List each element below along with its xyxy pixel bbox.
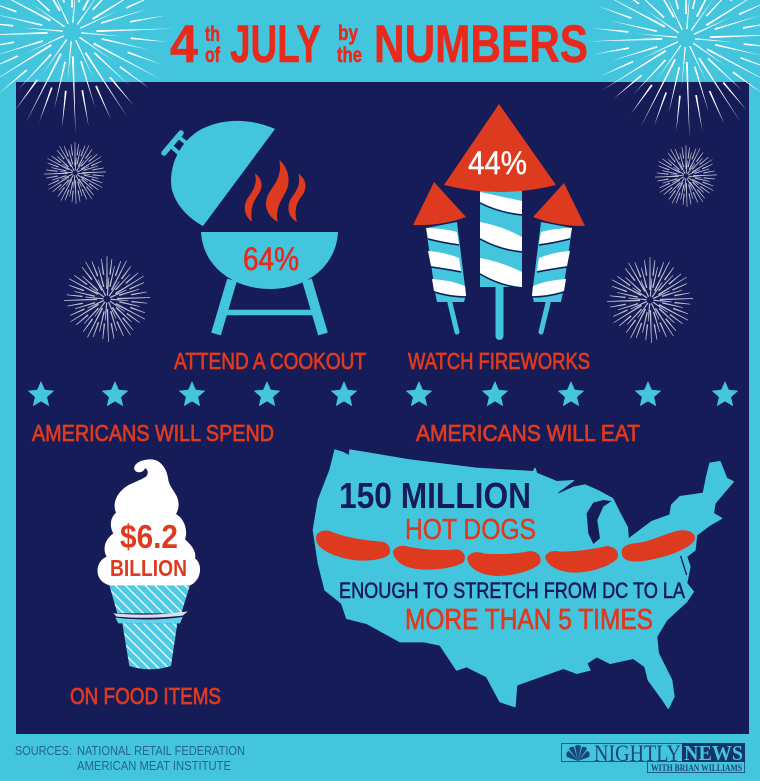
star divider [28,381,738,406]
firework: small upper right [655,145,717,207]
chesapeake bay [681,556,687,575]
firework: large lower left [64,256,150,342]
text: enough to stretch: ENOUGH TO STRETCH FROM DC TO LA [339,578,685,603]
title: th [205,23,220,46]
right rocket [532,183,585,332]
left rocket [413,182,466,332]
sources: SOURCES: [15,743,72,758]
label: attend a cookout: ATTEND A COOKOUT [174,348,366,374]
grill lid [171,121,275,226]
fireworks percent: 44% [468,145,527,181]
logo: nightly news: NIGHTLY [594,741,681,766]
spending amount [110,518,187,581]
firework: large lower right [607,257,693,343]
logo: nightly news [562,741,745,773]
firework: small upper left [44,142,106,204]
title: of [205,44,221,67]
flames [245,160,305,222]
sources: NATIONAL RETAIL FEDERATION [77,743,245,758]
map: united states [313,450,733,708]
lake michigan [587,500,612,544]
firework: top left [0,0,174,134]
title: 4 [170,15,198,74]
icon: ice cream [97,459,200,669]
grill bowl [201,232,338,289]
grill percent: 64% [243,241,299,277]
centre rocket [444,104,556,336]
lid handle [164,133,190,156]
label: watch fireworks: WATCH FIREWORKS [408,348,590,374]
label: americans will eat: AMERICANS WILL EAT [416,420,640,446]
title: JULY [230,15,321,74]
logo: nightly news: WITH BRIAN WILLIAMS [651,763,742,773]
spending amount: BILLION [110,555,187,581]
firework: top right [586,0,760,138]
ice cream cone [109,585,190,669]
sources: AMERICAN MEAT INSTITUTE [77,758,231,773]
text: hot dogs: HOT DOGS [405,514,536,546]
text: more than 5 times: MORE THAN 5 TIMES [405,604,653,636]
label: americans will spend: AMERICANS WILL SPEND [32,420,274,446]
map outline [313,450,733,708]
title: by [338,22,358,45]
grill legs [216,280,323,334]
icon: grill [164,121,338,334]
ice cream swirl [97,459,200,585]
icon: rockets [413,104,585,336]
title: the [337,44,362,67]
text: 150 million: 150 MILLION [339,475,531,516]
logo: nightly news: NEWS [684,741,743,765]
title: NUMBERS [374,15,588,74]
spending amount: $6.2 [120,518,178,555]
label: on food items: ON FOOD ITEMS [70,683,221,709]
icon: peacock [566,745,590,761]
sources [15,743,245,773]
title [170,15,588,74]
hot dogs [316,530,695,576]
